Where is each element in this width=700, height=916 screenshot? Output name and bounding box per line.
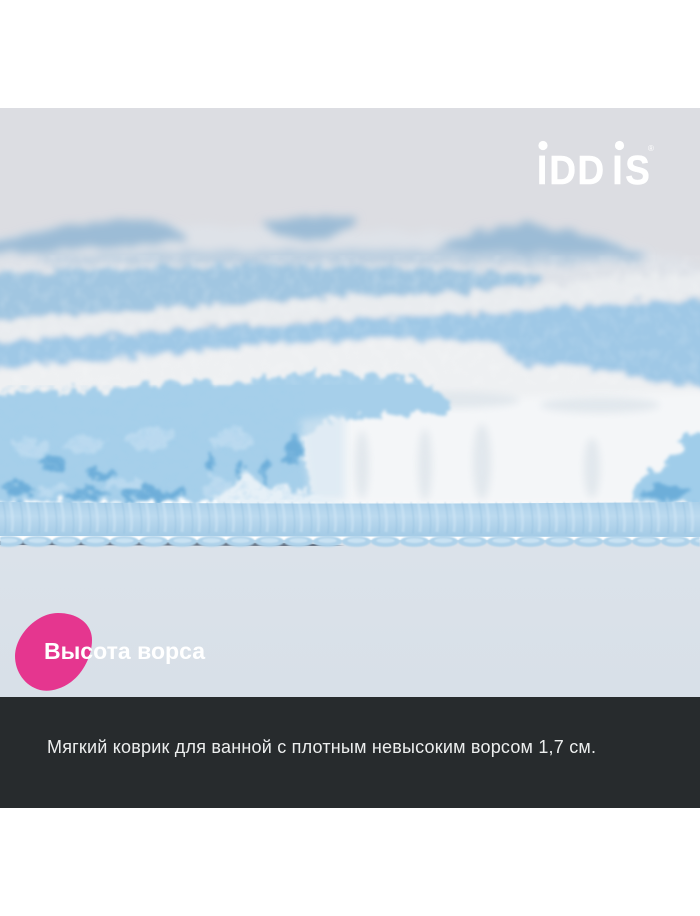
rug: pile light texture — [0, 255, 700, 385]
logo: IDDIS: IDDIS — [537, 148, 650, 193]
rug: upper blue band — [0, 264, 545, 324]
rug: pile dark texture — [0, 385, 305, 500]
rug: white pile folds — [355, 392, 660, 501]
rug: far bands — [0, 264, 700, 430]
logo: IDDIS: ® — [648, 144, 654, 153]
rug: pale far surface — [0, 226, 700, 420]
rug: contact shadow — [0, 541, 345, 546]
heading blob and title — [15, 613, 205, 691]
rug: far blue humps — [0, 217, 650, 264]
icon: pink blob — [15, 613, 92, 691]
text: description: Мягкий коврик для ванной с плотным невысоким ворсом 1,7 см. — [47, 737, 596, 757]
photo backdrop: wall — [0, 108, 700, 408]
rug: upper white stripe — [0, 272, 700, 344]
rug: corded edge — [0, 535, 700, 548]
rug: pile highlights — [12, 430, 252, 500]
panel: description band — [0, 697, 700, 808]
photo: bathroom rug close-up — [0, 108, 700, 697]
rug: white pile mass — [296, 390, 700, 506]
rug: middle blue band — [0, 300, 700, 396]
photo backdrop: floor — [0, 540, 700, 697]
rug: blue tufts on right edge — [632, 424, 700, 504]
rug: bound edge — [0, 502, 700, 537]
rug: foreground blue pile — [0, 373, 700, 504]
rug: pile shadows — [3, 435, 692, 500]
rug: pale transition between blue and white pile — [300, 414, 345, 500]
rug: white fringe spilling over binding — [215, 472, 345, 506]
heading: pile height: Высота ворса — [44, 638, 205, 664]
rug: lower white stripe — [0, 339, 700, 430]
rug: binding stitches — [0, 501, 700, 537]
